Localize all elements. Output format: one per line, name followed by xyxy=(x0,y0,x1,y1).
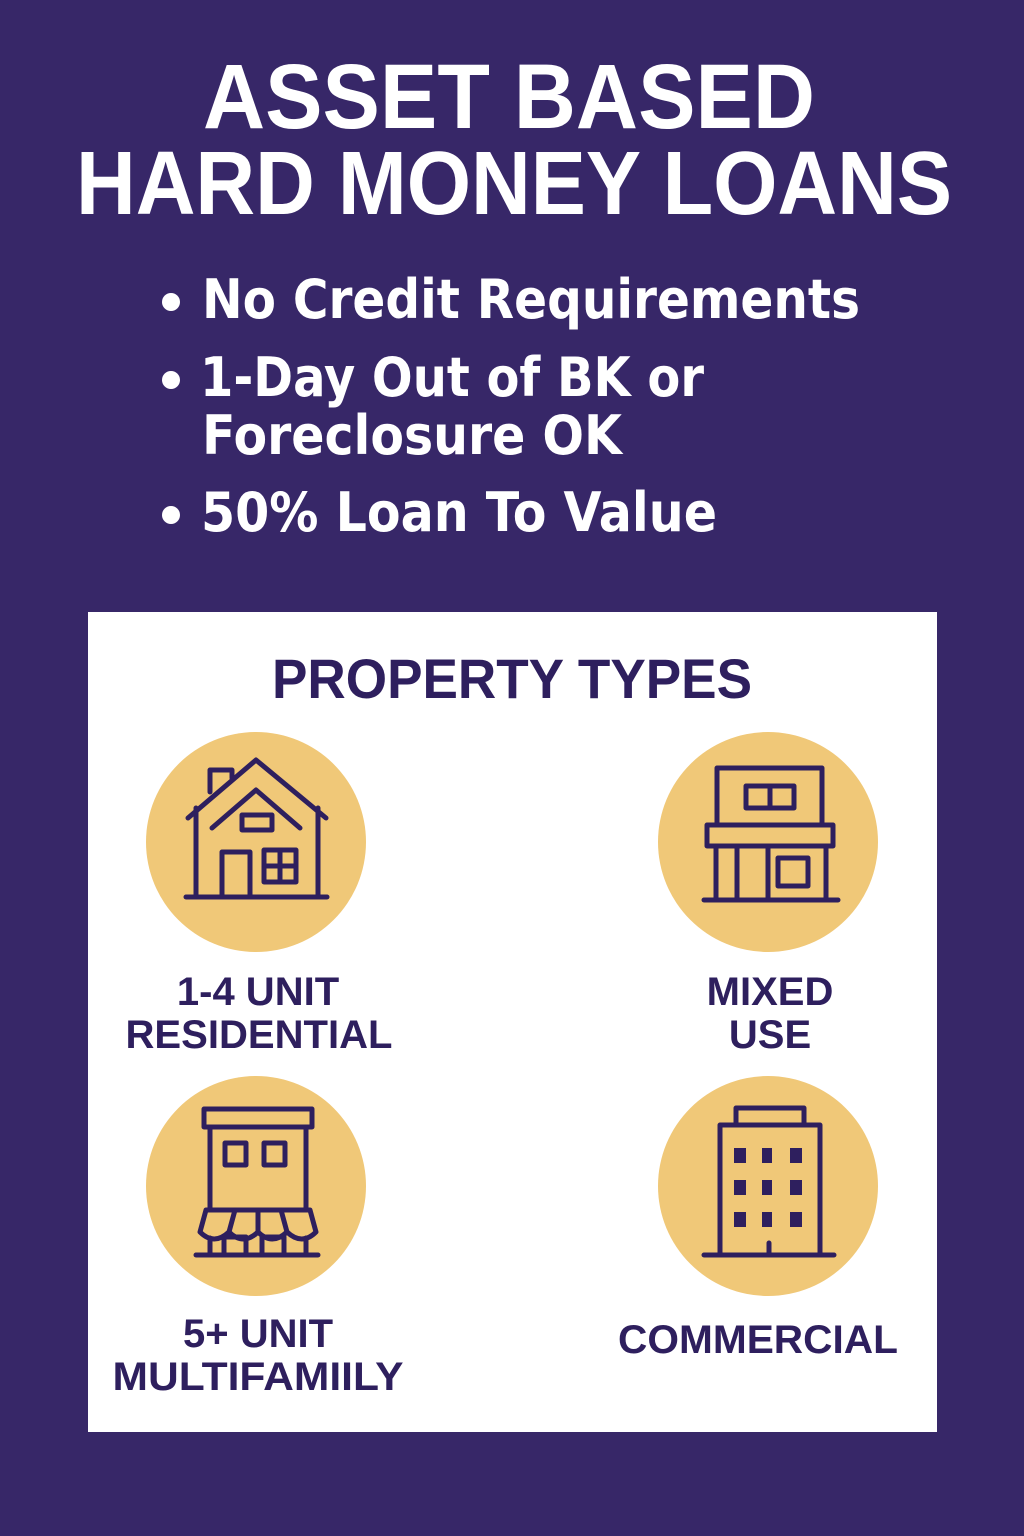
icon: commercial building xyxy=(658,1076,878,1296)
label: mixed use xyxy=(707,970,833,1057)
bullet list: No Credit Requirements xyxy=(202,268,860,331)
panel: property types xyxy=(88,612,937,1432)
label: 5+ unit multifamily xyxy=(112,1312,404,1399)
label: 1-4 unit residential: RESIDENTIAL xyxy=(126,1013,392,1057)
bullet list xyxy=(162,268,860,544)
title: ASSET BASED xyxy=(203,46,815,148)
bullet list: Foreclosure OK xyxy=(202,404,624,467)
label: 5+ unit multifamily: MULTIFAMIILY xyxy=(112,1355,404,1399)
label: commercial: COMMERCIAL xyxy=(618,1318,898,1362)
title xyxy=(76,46,952,234)
icon: mixed use xyxy=(658,732,878,952)
bullet list: 1-Day Out of BK or xyxy=(200,346,704,409)
panel heading: PROPERTY TYPES xyxy=(272,647,752,710)
label: 5+ unit multifamily: 5+ UNIT xyxy=(183,1312,333,1356)
label: 1-4 unit residential xyxy=(126,970,392,1057)
bullet list: 50% Loan To Value xyxy=(201,481,717,544)
label: 1-4 unit residential: 1-4 UNIT xyxy=(177,970,339,1014)
icon: multifamily storefront xyxy=(146,1076,366,1296)
label: mixed use: MIXED xyxy=(707,970,833,1014)
icon: house xyxy=(146,732,366,952)
title: HARD MONEY LOANS xyxy=(76,134,952,234)
label: mixed use: USE xyxy=(729,1013,811,1057)
